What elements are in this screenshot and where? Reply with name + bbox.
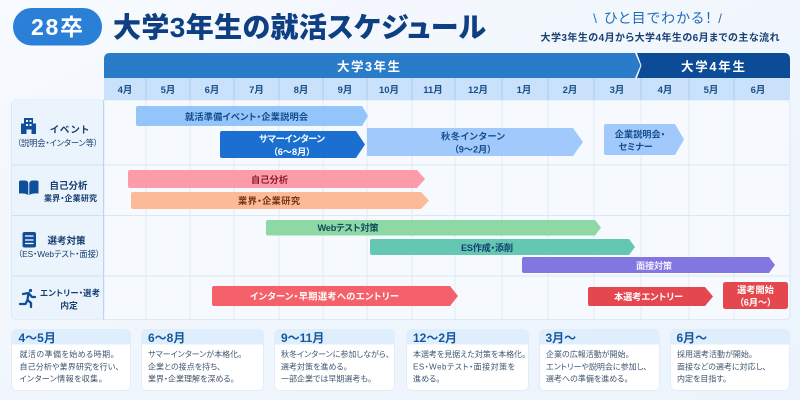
bar: 秋冬インターン (367, 128, 583, 156)
header: 大学3年生: 大学3年生 (337, 59, 400, 74)
card: 4〜5月: 自己分析や業界研究を行い、 (20, 361, 120, 371)
month row: 3月 (610, 85, 624, 96)
icon: building (21, 118, 36, 134)
bar: 就活準備イベント・企業説明会 (136, 106, 368, 126)
header: 大学4年生: 大学4年生 (681, 59, 745, 74)
header: 大学3年生 (104, 53, 640, 78)
month row: 4月 (658, 85, 672, 96)
card: 6〜8月: サマーインターンが本格化。 (148, 349, 242, 359)
row label: イベント: イベント (50, 125, 89, 136)
card: 12〜2月: 進める。 (413, 374, 440, 384)
bar: 企業説明会・セミナー: 企業説明会・ (615, 128, 665, 140)
subtitle callout: \ (593, 11, 597, 26)
icon: runner (20, 289, 35, 307)
card: 3月〜: エントリーや説明会に参加し、 (546, 361, 647, 371)
card: 3月〜: 3月〜 (546, 331, 576, 345)
month row: 12月 (468, 85, 488, 96)
bar: 面接対策: 面接対策 (636, 260, 672, 271)
card: 9〜11月: 9〜11月 (281, 331, 324, 345)
subtitle callout: 大学3年生の4月から大学4年生の6月までの主な流れ (540, 31, 780, 44)
bar: 自己分析: 自己分析 (251, 174, 288, 185)
row label: イベント (17, 118, 98, 148)
row label: 選考対策 (18, 232, 100, 259)
month row: 5月 (161, 85, 175, 96)
bar: 企業説明会・セミナー (604, 124, 684, 155)
bar: 業界・企業研究: 業界・企業研究 (238, 195, 300, 206)
card: 12〜2月 (406, 330, 528, 390)
bar: 選考開始: 選考開始 (737, 284, 775, 295)
row label: 選考対策: （ES・Webテスト・面接） (18, 249, 100, 259)
card: 12〜2月: ES・Webテスト・面接対策を (413, 361, 516, 371)
card: 6〜8月: 業界・企業理解を深める。 (148, 374, 235, 384)
card: 3月〜 (540, 330, 660, 390)
card: 4〜5月: 4〜5月 (18, 331, 56, 345)
bar: インターン・早期選考へのエントリー: インターン・早期選考へのエントリー (250, 290, 399, 302)
bar: 企業説明会・セミナー: セミナー (618, 142, 653, 152)
row label: 自己分析: 自己分析 (49, 180, 88, 192)
bar: 選考開始: （6月〜） (739, 298, 772, 308)
card: 12〜2月: 12〜2月 (413, 331, 457, 345)
subtitle callout: ひと目でわかる！ (604, 10, 712, 26)
row label: イベント: （説明会・インターン等） (17, 138, 98, 148)
card: 9〜11月: 秋冬インターンに参加しながら、 (281, 349, 390, 359)
row label: エントリー・選考内定: 内定 (60, 300, 78, 310)
bar: 自己分析 (128, 170, 425, 188)
card: 6月〜: 6月〜 (676, 331, 707, 345)
card: 4〜5月: 就活の準備を始める時期。 (20, 349, 114, 359)
bar: 選考開始 (723, 282, 788, 309)
month row: 7月 (249, 85, 264, 96)
month row: 10月 (379, 85, 399, 96)
bar: Webテスト対策: Webテスト対策 (318, 222, 378, 233)
bar: 面接対策 (522, 257, 775, 273)
bar: 本選考エントリー (588, 287, 713, 306)
row label: エントリー・選考内定 (20, 288, 100, 310)
month row: 9月 (338, 85, 352, 96)
month row: 8月 (294, 85, 308, 96)
card: 6月〜: 内定を目指す。 (677, 374, 727, 384)
card: 4〜5月: インターン情報を収集。 (19, 374, 102, 384)
bar: サマーインターン (220, 131, 365, 158)
bar: 秋冬インターン: 秋冬インターン (441, 130, 505, 142)
row label: エントリー・選考内定: エントリー・選考 (40, 288, 100, 298)
card: 6月〜 (670, 330, 790, 390)
bar: 秋冬インターン: （9〜2月） (454, 144, 492, 154)
icon: open book (19, 180, 38, 195)
card: 9〜11月: 一部企業では早期選考も。 (281, 374, 372, 384)
card: 9〜11月 (274, 330, 394, 390)
month row: 4月 (118, 85, 132, 96)
card: 12〜2月: 本選考を見据えた対策を本格化。 (413, 349, 526, 359)
month row: 2月 (563, 85, 577, 96)
card: 3月〜: 企業の広報活動が開始。 (546, 349, 630, 359)
card: 3月〜: 選考への準備を進める。 (546, 374, 628, 384)
card: 6〜8月: 企業との接点を持ち、 (148, 361, 221, 371)
row label: 自己分析 (19, 180, 97, 203)
month row (104, 78, 790, 100)
month row: 6月 (205, 85, 219, 96)
badge: 28卒 (13, 8, 102, 46)
bar: ES作成・添削: ES作成・添削 (461, 242, 513, 253)
card: 6月〜: 面接などの選考に対応し、 (677, 361, 766, 371)
row label: 自己分析: 業界・企業研究 (44, 193, 97, 203)
month row: 5月 (704, 85, 718, 96)
month row: 11月 (423, 85, 443, 96)
card: 4〜5月 (12, 330, 130, 390)
subtitle callout: / (718, 11, 722, 26)
header: 大学4年生 (637, 53, 790, 78)
card: 9〜11月: 選考対策を進める。 (281, 361, 348, 371)
title: 大学3年生の就活スケジュール (113, 12, 486, 43)
card: 6〜8月: 6〜8月 (148, 331, 185, 345)
bar: Webテスト対策 (266, 220, 601, 236)
row label: 選考対策: 選考対策 (47, 235, 86, 247)
badge: 28卒: 28卒 (31, 14, 83, 40)
bar: ES作成・添削 (370, 239, 635, 255)
bar: サマーインターン: サマーインターン (259, 133, 325, 144)
subtitle callout (540, 10, 780, 44)
bar: インターン・早期選考へのエントリー (212, 286, 458, 306)
panel: timeline background (12, 100, 790, 320)
bar: サマーインターン: （6〜8月） (273, 147, 311, 157)
month row: 6月 (751, 85, 765, 96)
bar: 就活準備イベント・企業説明会: 就活準備イベント・企業説明会 (185, 111, 309, 122)
bar: 本選考エントリー: 本選考エントリー (614, 291, 683, 302)
bar: 業界・企業研究 (131, 192, 429, 209)
card: 6〜8月 (142, 330, 264, 390)
month row: 1月 (517, 85, 531, 96)
card: 6月〜: 採用選考活動が開始。 (677, 349, 753, 359)
icon: document (22, 232, 36, 248)
